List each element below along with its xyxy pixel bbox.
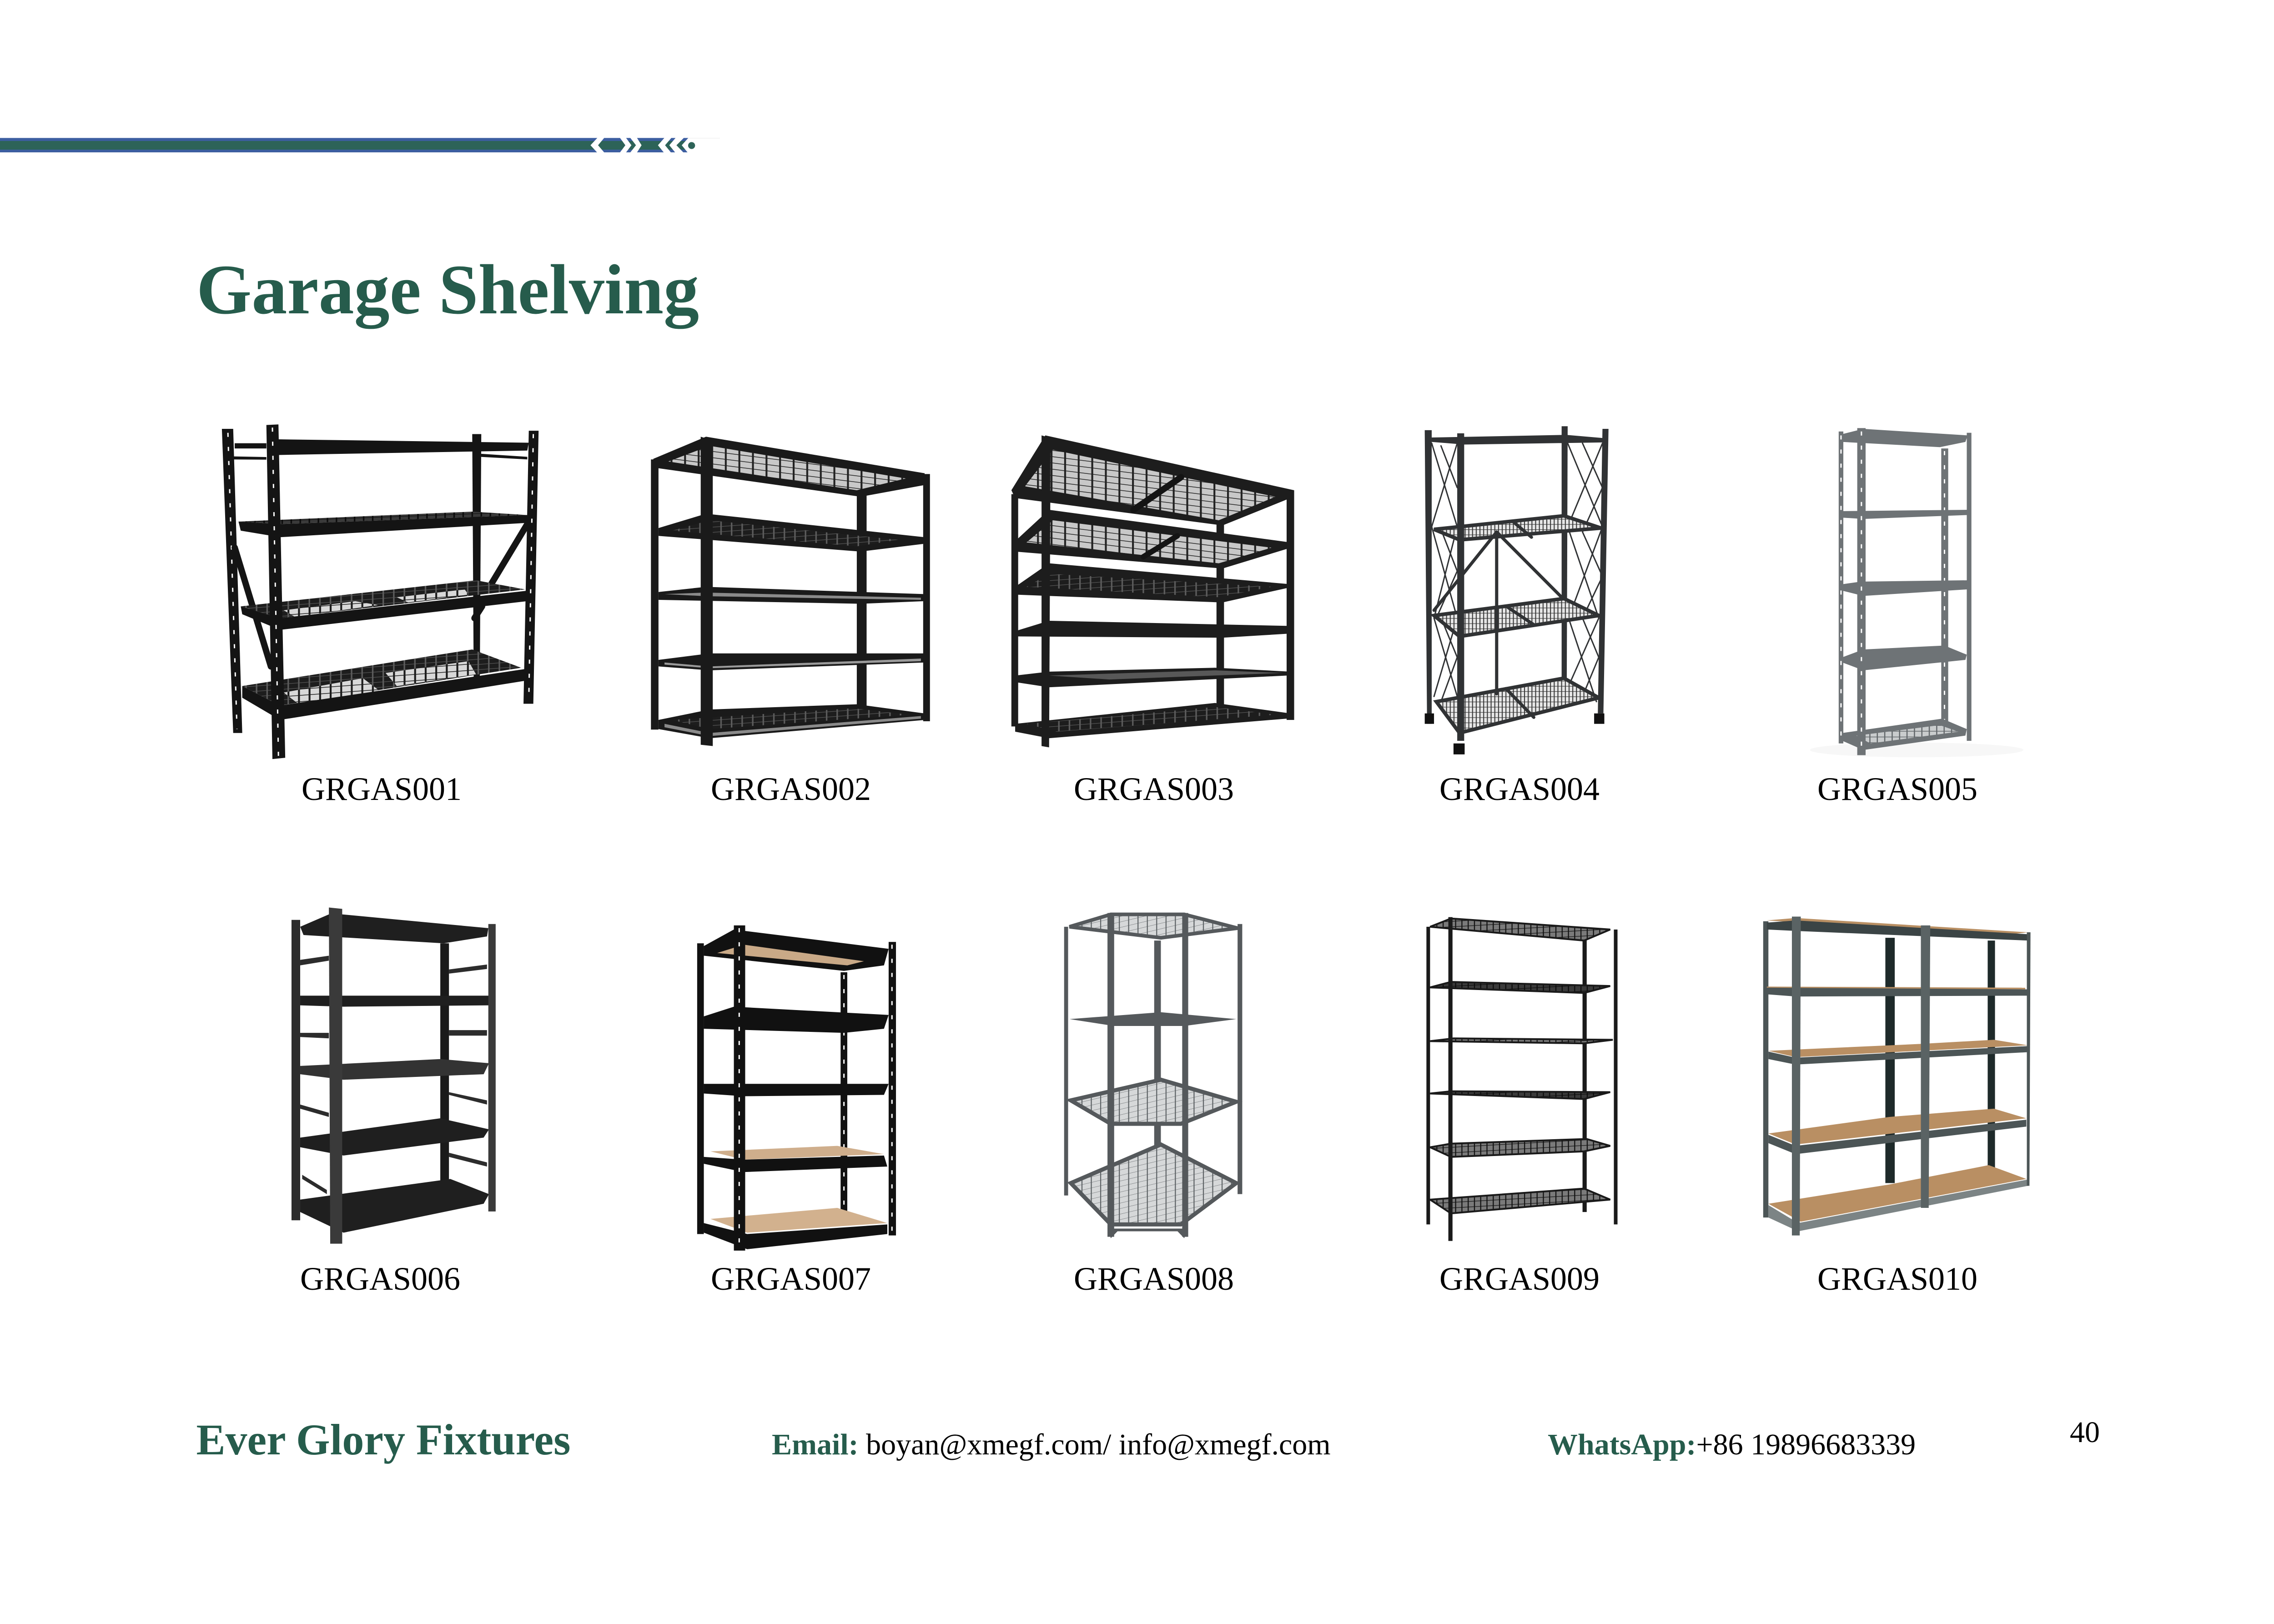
shelf tiers [653,437,925,738]
back uprights [1426,927,1587,1224]
front uprights [267,424,538,759]
shelf tiers [300,915,490,1233]
product image: GRGAS010 [1763,916,2031,1236]
back uprights [1011,494,1224,726]
product code: GRGAS004: GRGAS004 [1439,771,1600,807]
front uprights [1792,916,2031,1236]
shelf tiers [238,439,529,720]
product image: GRGAS005 [1810,428,2023,757]
product image: GRGAS009 [1426,917,1618,1241]
product code: GRGAS005: GRGAS005 [1817,771,1977,807]
product code: GRGAS003: GRGAS003 [1074,771,1234,807]
page number: 40 [2070,1416,2100,1449]
braces and rear rails [227,443,527,666]
product code: GRGAS007: GRGAS007 [711,1261,871,1297]
shelf tiers [704,930,889,1249]
floor shadow [1810,743,2023,757]
shelf tiers [1432,435,1602,733]
product code: GRGAS009: GRGAS009 [1439,1261,1600,1297]
front uprights [1449,917,1618,1241]
front uprights [734,925,896,1251]
front uprights [1041,435,1294,747]
footer: WhatsApp: WhatsApp:+86 19896683339 [1548,1428,1916,1461]
front uprights [329,907,496,1244]
footer: email: Email: boyan@xmegf.com/ info@xmegf.com [772,1428,1331,1461]
front uprights [1457,429,1609,741]
product image: GRGAS008 [1064,913,1242,1238]
product image: GRGAS007 [697,925,896,1251]
back uprights [1064,924,1242,1196]
product code: GRGAS002: GRGAS002 [711,771,871,807]
shelf tiers [1069,915,1238,1224]
shelf tiers [1011,435,1294,738]
product image: GRGAS004 [1425,426,1609,754]
product image: GRGAS003 [1011,435,1294,747]
back uprights and cross lattice [1425,426,1602,724]
front uprights [1107,913,1188,1238]
shelf tiers [1842,429,1968,750]
back uprights [222,429,481,733]
product image: GRGAS006 [292,907,496,1244]
header ribbon with chevrons [0,138,720,152]
back uprights [651,459,866,729]
product code: GRGAS010: GRGAS010 [1817,1261,1977,1297]
product image: GRGAS001 [222,424,538,759]
footer: company name: Ever Glory Fixtures [196,1415,570,1464]
front uprights [701,437,930,746]
shelf tiers [1767,918,2028,1232]
side braces [300,956,487,1194]
wire shelf tiers [1430,919,1613,1213]
centre fold struts [1434,522,1562,717]
casters [1425,714,1605,754]
product image: GRGAS002 [651,437,930,746]
product code: GRGAS006: GRGAS006 [300,1261,460,1297]
back uprights [697,943,847,1234]
back uprights [1839,432,1948,744]
front uprights [1841,428,1972,755]
product code: GRGAS008: GRGAS008 [1074,1261,1234,1297]
back uprights [1763,921,1995,1217]
product code: GRGAS001: GRGAS001 [302,771,462,807]
title: Garage Shelving [196,250,699,329]
back uprights [292,920,449,1220]
